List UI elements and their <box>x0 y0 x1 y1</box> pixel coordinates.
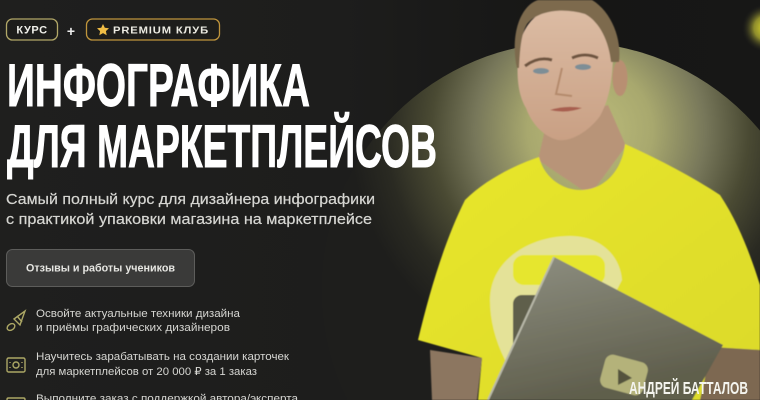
presenter photo <box>418 0 760 400</box>
head <box>518 8 613 140</box>
icon: brush <box>6 311 25 332</box>
title <box>7 52 437 180</box>
shirt logo <box>490 236 622 400</box>
yellow light blob <box>742 4 760 52</box>
laptop <box>488 257 723 400</box>
button: reviews: Отзывы и работы учеников <box>26 262 175 274</box>
subtitle: с практикой упаковки магазина на маркетплейсе <box>6 212 372 228</box>
eyes and brows <box>525 55 598 74</box>
benefit 2 <box>7 351 289 378</box>
benefit 1: Освойте актуальные техники дизайна <box>36 308 241 320</box>
nose shadow <box>556 68 572 96</box>
subtitle <box>6 192 375 228</box>
badge: premium club: PREMIUM КЛУБ <box>113 24 209 36</box>
hair <box>515 0 620 68</box>
benefit 1 <box>6 308 241 334</box>
neck <box>538 105 626 195</box>
subtitle: Самый полный курс для дизайнера инфографики <box>6 192 375 208</box>
icon: star <box>97 24 109 35</box>
mouth <box>550 107 582 112</box>
icon: document <box>7 398 25 400</box>
t-shirt <box>418 144 760 400</box>
badge: course <box>6 19 58 40</box>
badge: premium club <box>86 19 220 40</box>
title: ДЛЯ МАРКЕТПЛЕЙСОВ <box>7 113 437 180</box>
benefit 1: и приёмы графических дизайнеров <box>36 322 230 334</box>
button: reviews <box>6 250 194 286</box>
plus sign: + <box>67 23 75 39</box>
benefit 2: для маркетплейсов от 20 000 ₽ за 1 заказ <box>36 366 257 378</box>
arms <box>430 350 482 400</box>
ear <box>612 60 628 96</box>
glowing circle behind presenter <box>322 42 760 400</box>
icon: banknote <box>7 358 25 372</box>
benefit 2: Научитесь зарабатывать на создании карточек <box>36 351 289 363</box>
laptop logo <box>598 353 650 397</box>
title: ИНФОГРАФИКА <box>7 52 310 119</box>
badge: course: КУРС <box>16 24 48 36</box>
